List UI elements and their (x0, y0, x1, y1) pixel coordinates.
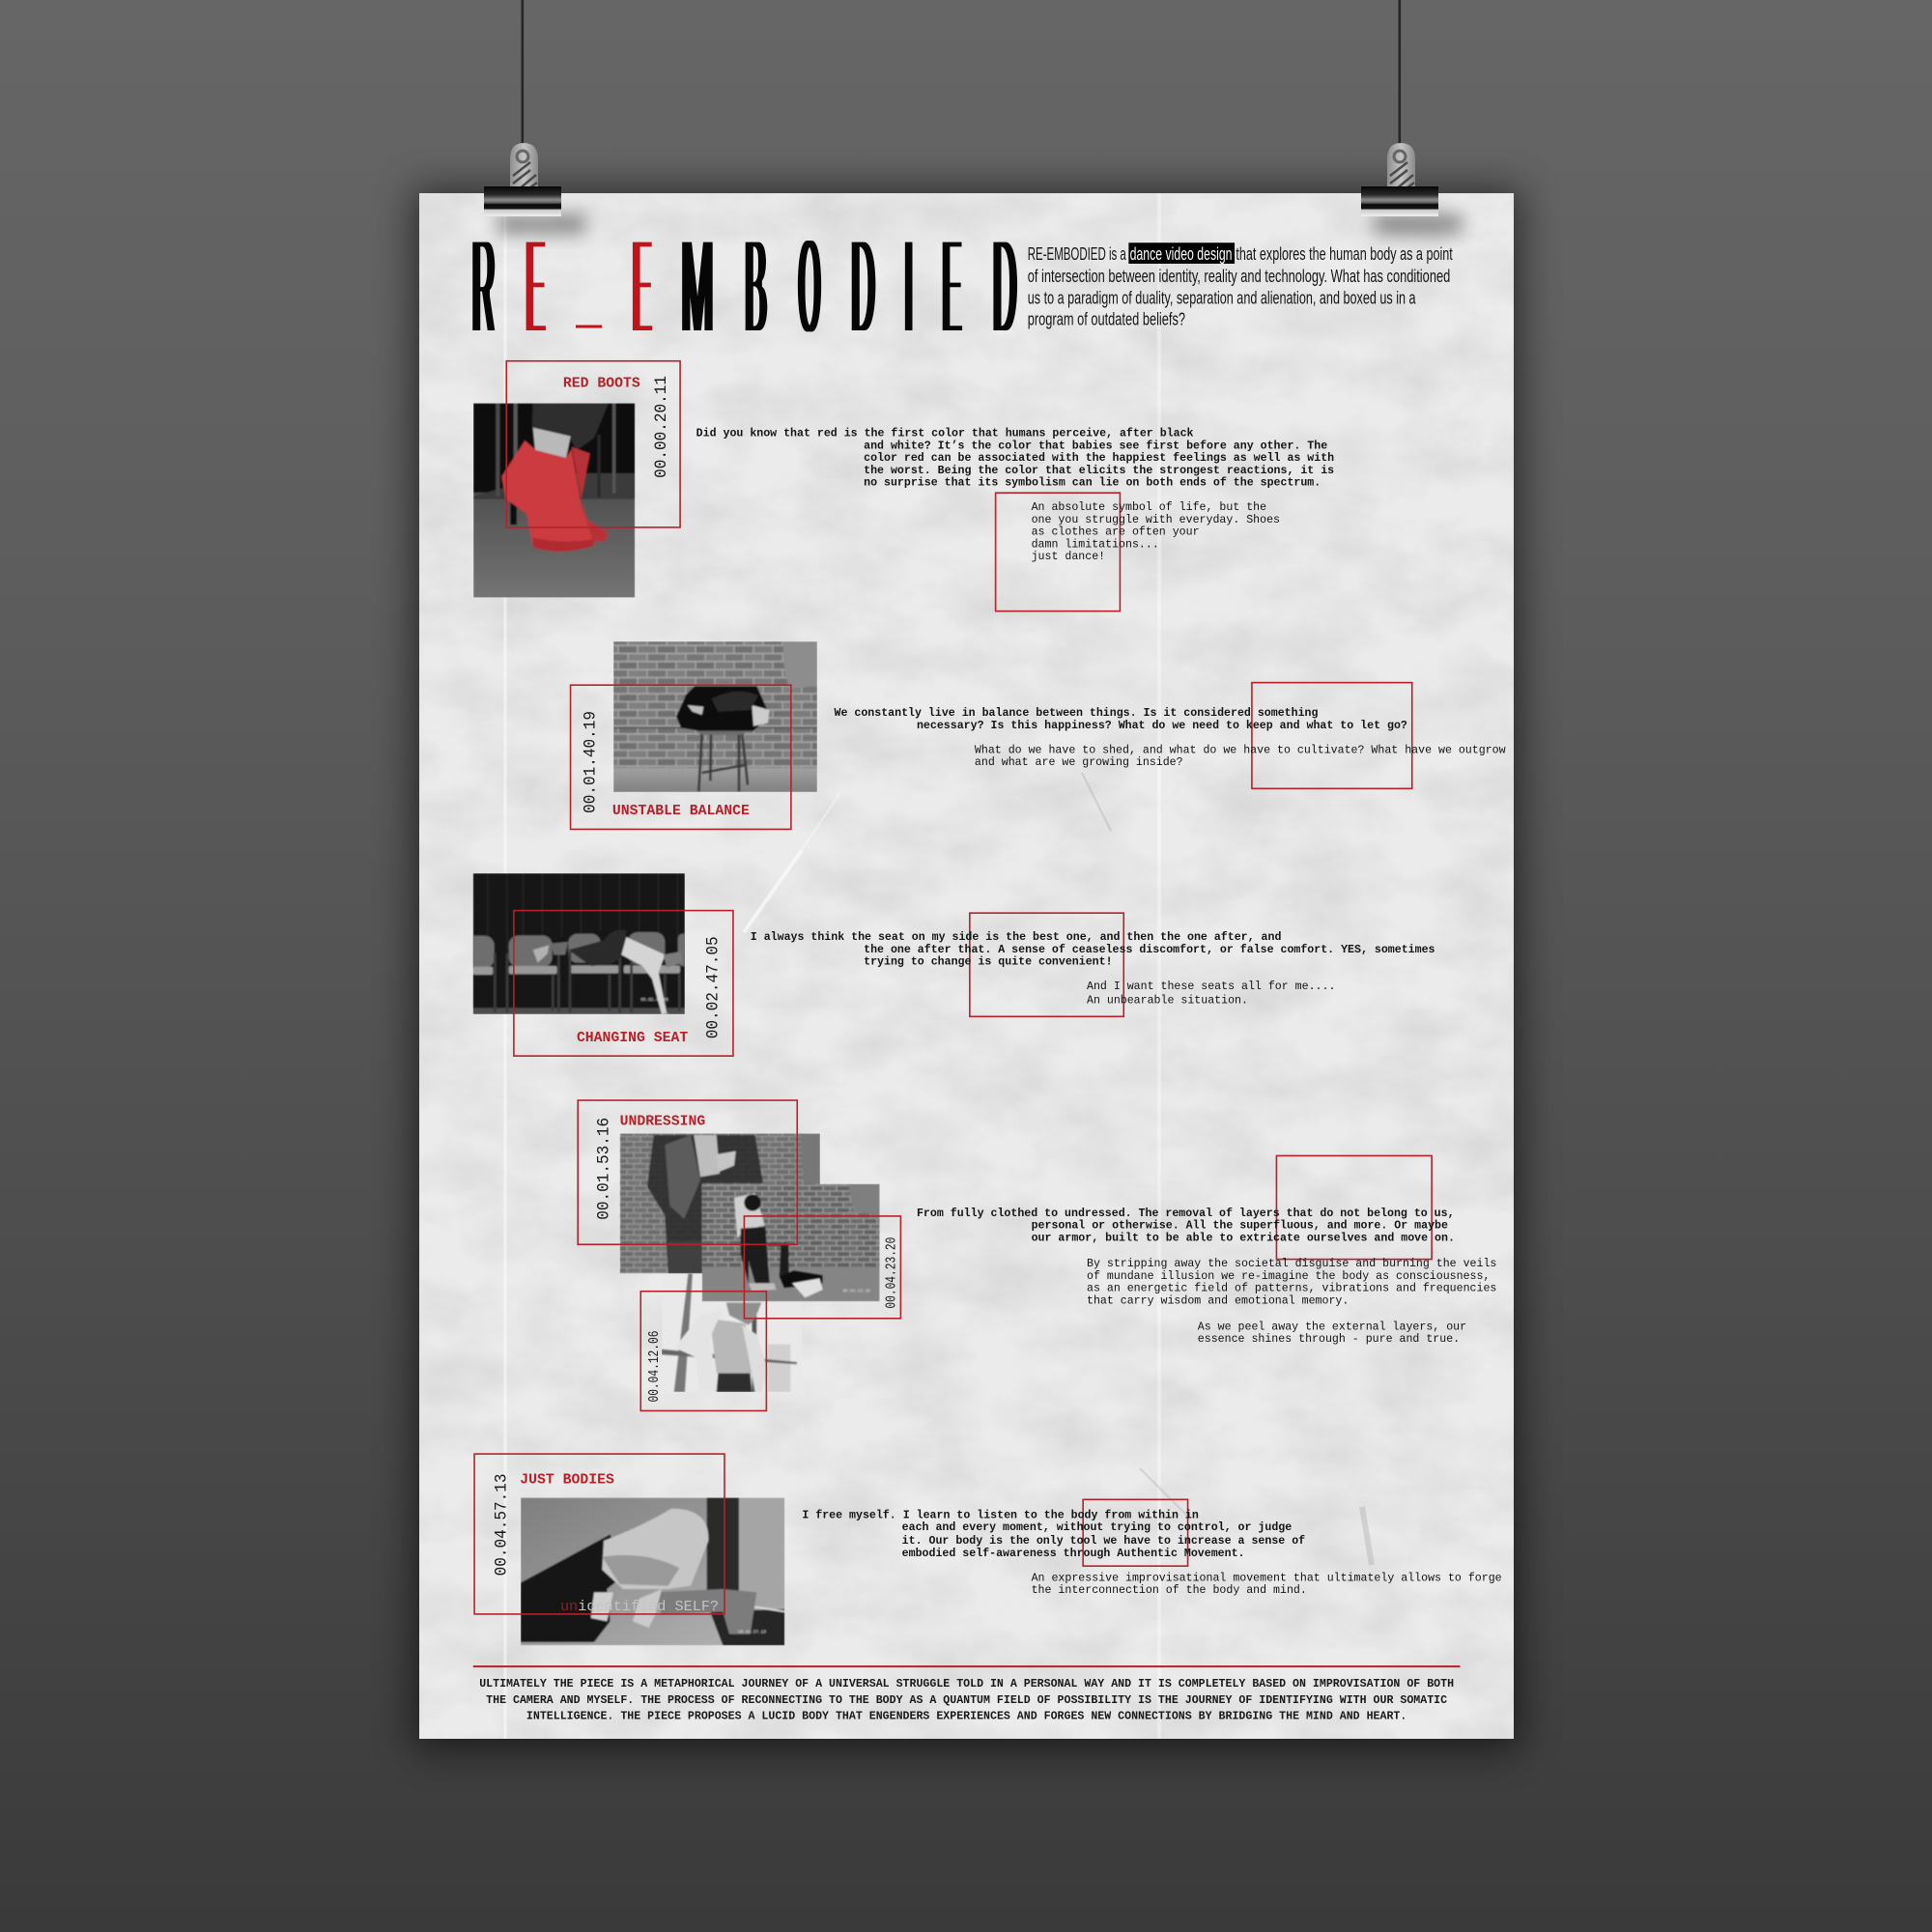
caption: unidentified SELF: unidentified SELF? (560, 1598, 719, 1615)
intro paragraph: dance video design (1130, 243, 1233, 264)
section 1: red boots frame and labels: RED BOOTS (563, 377, 640, 392)
closing statement: THE CAMERA AND MYSELF. THE PROCESS OF RECONNECTING TO THE BODY AS A QUANTUM FIELD OF POSSIBILITY IS THE JOURNEY OF IDENTIFYING WITH OUR SOMATIC (486, 1694, 1447, 1707)
title: RE_EMBODIED: _ (578, 180, 600, 332)
title: RE_EMBODIED: M (681, 211, 713, 363)
section 1: body text: Did you know that red is the first color that humans perceive, after black (696, 428, 1194, 440)
section 5: body text: embodied self-awareness through Authentic Movement. (902, 1548, 1245, 1560)
section 3: body text: I always think the seat on my side is the best one, and then the one after, and (751, 931, 1281, 944)
section 4: body text: that carry wisdom and emotional memory. (1087, 1294, 1349, 1307)
photo: undressing, white shirt (662, 1273, 802, 1392)
title: RE_EMBODIED: I (905, 210, 913, 363)
section 3: changing seat frame and labels: CHANGING SEAT (577, 1031, 688, 1046)
section 4: body text: By stripping away the societal disguise and burning the veils (1087, 1258, 1496, 1270)
title: RE_EMBODIED (472, 180, 1016, 363)
section 4: undressing frames and labels: 00.01.53.16 (594, 1118, 613, 1220)
section 5: body text: I free myself. I learn to listen to the body from within in (802, 1509, 1199, 1521)
section 1: red boots frame and labels (506, 361, 680, 527)
intro paragraph: that explores the human body as a point (1236, 243, 1453, 264)
photo: red boots (473, 403, 635, 599)
section 5: just bodies frame and labels: JUST BODIES (520, 1473, 614, 1489)
section 5: just bodies frame and labels: 00.04.57.13 (493, 1474, 512, 1576)
section 4: body text: From fully clothed to undressed. The removal of layers that do not belong to us, (917, 1208, 1455, 1220)
section 2: unstable balance frame and labels: 00.01.40.19 (581, 711, 600, 813)
section 4: body text: personal or otherwise. All the superfluous, and more. Or maybe (1032, 1220, 1448, 1233)
section 3: changing seat frame and labels: 00.02.47.05 (703, 936, 723, 1038)
photo: just bodies (521, 1497, 784, 1645)
poster shadow (413, 189, 1520, 1750)
section 1: body text: no surprise that its symbolism can lie on both ends of the spectrum. (864, 477, 1321, 490)
intro paragraph: of intersection between identity, reality and technology. What has conditioned (1028, 266, 1450, 286)
section 5: just bodies frame and labels (474, 1454, 724, 1614)
section 4: undressing frames and labels: UNDRESSING (620, 1115, 705, 1130)
section 4: body text: as an energetic field of patterns, vibrations and frequencies (1087, 1283, 1496, 1295)
section 1: body text: color red can be associated with the happiest feelings as well as with (864, 452, 1334, 465)
title: RE_EMBODIED: E (633, 210, 651, 363)
section 4: undressing frames and labels: 00.04.12.06 (647, 1331, 663, 1403)
photo: unstable balance (613, 641, 817, 792)
photo: changing seat: 00.02.47.05 (640, 998, 668, 1003)
section 5: body text: it. Our body is the only tool we have to increase a sense of (902, 1535, 1305, 1548)
closing statement: ULTIMATELY THE PIECE IS A METAPHORICAL JOURNEY OF A UNIVERSAL STRUGGLE TOLD IN A PERSONAL WAY AND IT IS COMPLETELY BASED ON IMPROVISATION OF BOTH (479, 1678, 1454, 1690)
section 1: body text: and white? It’s the color that babies see first before any other. The (864, 440, 1327, 452)
photo: undressing, wide shot: 00.04.23.20 (842, 1290, 870, 1294)
section 4: body text: As we peel away the external layers, our (1198, 1321, 1466, 1333)
section 2: body text: We constantly live in balance between things. Is it considered something (835, 707, 1318, 720)
section 3: body text: And I want these seats all for me.... (1087, 980, 1335, 993)
title: RE_EMBODIED: R (472, 210, 495, 362)
section 4: body text: our armor, built to be able to extricate ourselves and move on. (1032, 1232, 1455, 1244)
title: RE_EMBODIED: E (526, 210, 545, 363)
title: RE_EMBODIED: B (745, 210, 767, 362)
intro paragraph (1028, 242, 1453, 329)
section 4: body text: of mundane illusion we re-imagine the body as consciousness, (1087, 1270, 1490, 1283)
section 1: body text (696, 428, 1334, 611)
closing statement: INTELLIGENCE. THE PIECE PROPOSES A LUCID BODY THAT ENGENDERS EXPERIENCES AND FORGES NEW CONNECTIONS BY BRIDGING THE MIND AND HEART. (526, 1710, 1406, 1722)
intro paragraph: RE-EMBODIED is a (1028, 243, 1126, 264)
section 5: body text: An expressive improvisational movement that ultimately allows to forge (1032, 1572, 1502, 1584)
title: RE_EMBODIED: D (851, 210, 875, 362)
section 2: unstable balance frame and labels: UNSTABLE BALANCE (612, 804, 750, 819)
section 3: changing seat frame and labels (514, 911, 733, 1056)
section 2: body text: necessary? Is this happiness? What do we need to keep and what to let go? (917, 720, 1407, 732)
title: RE_EMBODIED: D (993, 210, 1016, 362)
section 1: body text: the worst. Being the color that elicits the strongest reactions, it is (864, 465, 1334, 477)
closing statement (473, 1666, 1460, 1722)
intro paragraph: us to a paradigm of duality, separation and alienation, and boxed us in a (1028, 287, 1416, 307)
section 4: undressing frames and labels (578, 1100, 900, 1410)
photo: changing seat (459, 873, 691, 1014)
photo: just bodies: 00.04.57.13 (738, 1630, 766, 1634)
title: RE_EMBODIED: O (799, 210, 820, 363)
section 1: body text: damn limitations... (1032, 538, 1159, 551)
section 2: body text: What do we have to shed, and what do we have to cultivate? What have we outgrow (975, 744, 1506, 756)
section 2: body text: and what are we growing inside? (975, 756, 1183, 769)
title: RE_EMBODIED: E (943, 210, 961, 363)
section 3: body text: An unbearable situation. (1087, 994, 1248, 1007)
section 3: body text: the one after that. A sense of ceaseless discomfort, or false comfort. YES, sometimes (864, 944, 1435, 956)
poster sheet (419, 193, 1514, 1739)
photo: undressing, close figure (620, 1133, 820, 1273)
section 5: body text: the interconnection of the body and mind. (1032, 1584, 1307, 1597)
section 4: undressing frames and labels: 00.04.23.20 (885, 1237, 900, 1309)
section 1: red boots frame and labels: 00.00.20.11 (652, 376, 671, 478)
icon: left binder clip and wire (484, 0, 584, 234)
section 1: body text: just dance! (1032, 551, 1105, 563)
section 1: body text: as clothes are often your (1032, 526, 1200, 539)
section 2: body text (835, 683, 1506, 788)
section 2: unstable balance frame and labels (571, 685, 791, 829)
section 1: body text: An absolute symbol of life, but the (1032, 501, 1266, 514)
photo: undressing, wide shot (702, 1184, 880, 1301)
section 1: body text: one you struggle with everyday. Shoes (1032, 514, 1280, 526)
section 3: body text: trying to change is quite convenient! (864, 956, 1113, 969)
section 5: body text (802, 1499, 1502, 1597)
section 4: body text: essence shines through - pure and true. (1198, 1333, 1460, 1346)
section 3: body text (751, 913, 1435, 1016)
icon: right binder clip and wire (1361, 0, 1462, 234)
intro paragraph: program of outdated beliefs? (1028, 309, 1185, 329)
section 5: body text: each and every moment, without trying to control, or judge (902, 1521, 1292, 1534)
section 4: body text (917, 1155, 1496, 1346)
